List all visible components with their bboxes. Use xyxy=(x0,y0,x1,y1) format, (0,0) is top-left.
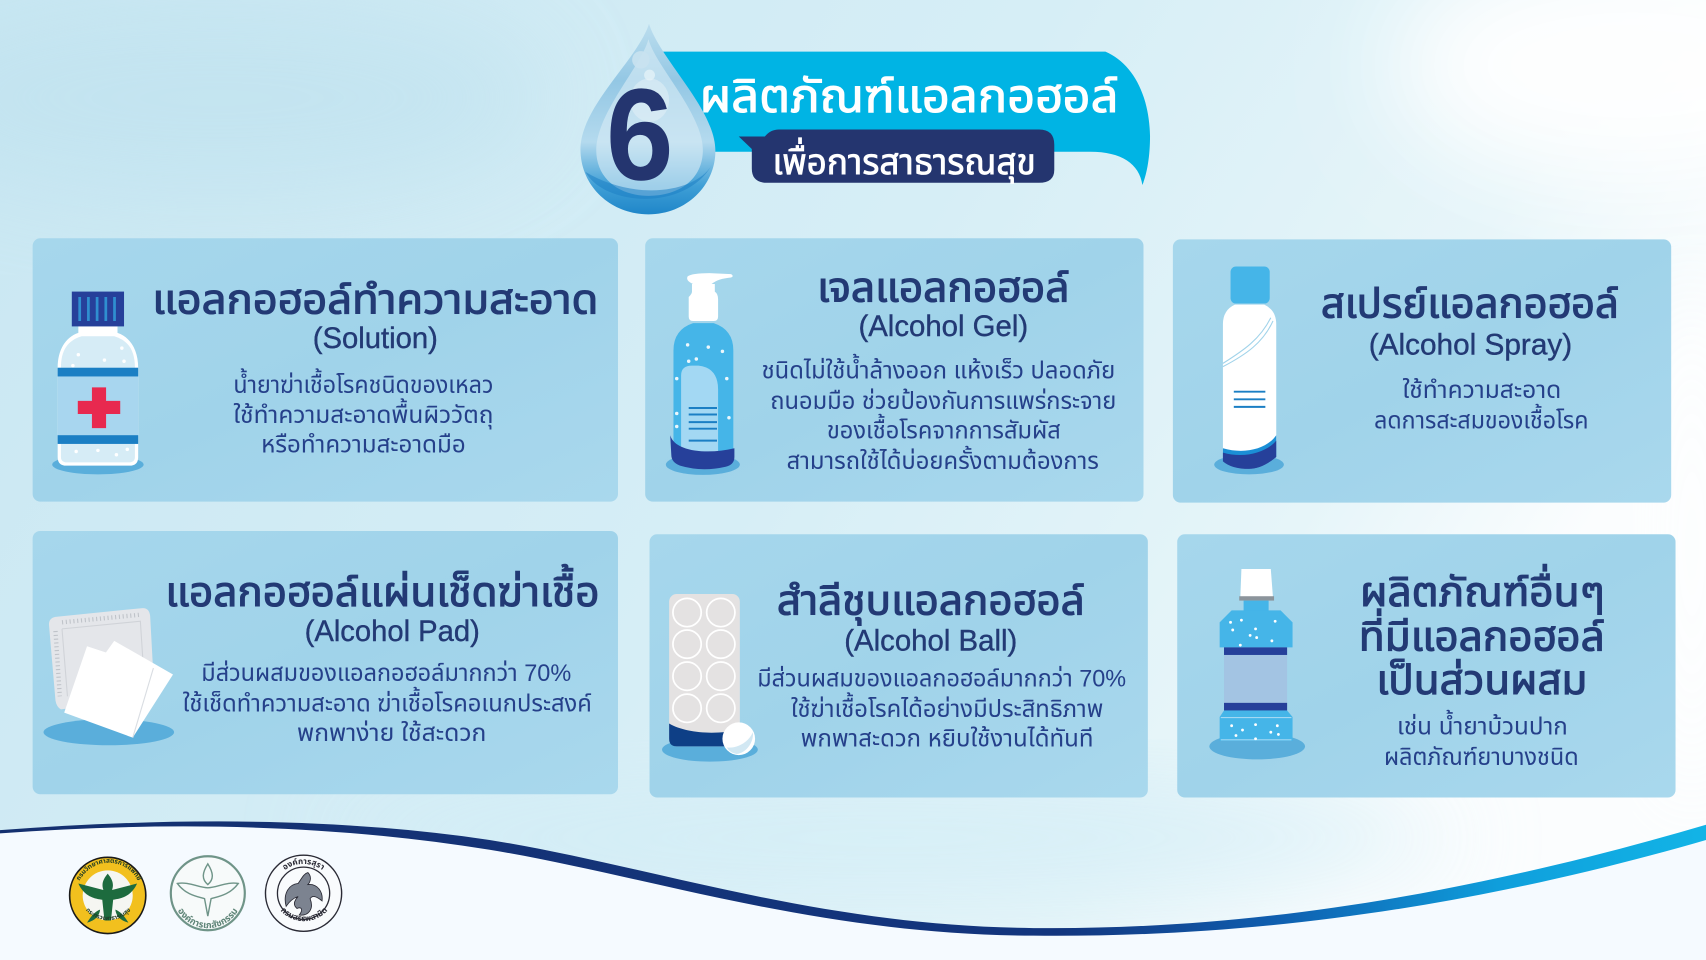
icon: alcohol ball pack xyxy=(662,594,758,762)
description: alcohol pad xyxy=(183,659,592,747)
description: alcohol gel: สามารถใช้ได้บ่อยครั้งตามต้องการ xyxy=(787,445,1099,475)
description: alcohol spray: ลดการสะสมของเชื้อโรค xyxy=(1374,404,1588,435)
heading: alcohol spray: สเปรย์แอลกอฮอล์ xyxy=(1321,281,1619,327)
heading: other products: ที่มีแอลกอฮอล์ xyxy=(1359,609,1605,660)
description: solution xyxy=(233,368,493,459)
description: alcohol spray: ใช้ทำความสะอาด xyxy=(1402,377,1561,404)
description: alcohol ball: พกพาสะดวก หยิบใช้งานได้ทันที xyxy=(801,725,1093,752)
heading: other products: เป็นส่วนผสม xyxy=(1376,657,1587,703)
logo: department of medical sciences xyxy=(68,856,147,934)
panel: alcohol gel xyxy=(645,238,1143,502)
panel: alcohol spray xyxy=(1173,239,1671,503)
heading: solution: แอลกอฮอล์ทำความสะอาด xyxy=(152,276,598,322)
description: solution: ใช้ทำความสะอาดพื้นผิววัตถุ xyxy=(233,398,493,430)
logo: government pharmaceutical organization xyxy=(170,855,246,932)
water drop with number 6 xyxy=(580,24,715,214)
description: other products: ผลิตภัณฑ์ยาบางชนิด xyxy=(1384,744,1579,771)
subtitle pill xyxy=(739,129,1054,183)
description: alcohol gel xyxy=(762,354,1116,475)
icon: solution bottle xyxy=(52,292,144,474)
description: alcohol ball: มีส่วนผสมของแอลกอฮอล์มากกว่า 70% xyxy=(757,665,1126,693)
panel: solution xyxy=(33,238,618,502)
icon: alcohol pads xyxy=(44,608,174,745)
subheading: alcohol gel: (Alcohol Gel) xyxy=(858,310,1028,343)
logo: department of medical sciences: กระทรวงสาธารณสุข xyxy=(86,908,130,920)
description: alcohol pad: ใช้เช็ดทำความสะอาด ฆ่าเชื้อโรคอเนกประสงค์ xyxy=(183,687,592,718)
description: alcohol pad: พกพาง่าย ใช้สะดวก xyxy=(297,719,486,747)
description: alcohol ball xyxy=(757,665,1126,752)
title banner xyxy=(580,24,1150,214)
description: other products: เช่น น้ำยาบ้วนปาก xyxy=(1397,709,1568,740)
description: alcohol gel: ของเชื้อโรคจากการสัมผัส xyxy=(827,414,1061,444)
logo: excise department: องค์การสุรา xyxy=(282,858,324,870)
logo: department of medical sciences: กรมวิทยาศาสตร์การแพทย์ xyxy=(77,858,142,880)
banner ribbon xyxy=(662,52,1150,185)
description: alcohol pad: มีส่วนผสมของแอลกอฮอล์มากกว่า 70% xyxy=(201,659,571,687)
title heading: ผลิตภัณฑ์แอลกอฮอล์ xyxy=(700,70,1118,122)
subheading: alcohol ball: (Alcohol Ball) xyxy=(844,625,1017,658)
heading: alcohol pad: แอลกอฮอล์แผ่นเช็ดฆ่าเชื้อ xyxy=(165,564,599,615)
subheading: alcohol spray: (Alcohol Spray) xyxy=(1369,329,1572,362)
footer white area with wave xyxy=(0,821,1706,960)
icon: gel pump bottle xyxy=(666,273,740,475)
icon: spray can xyxy=(1214,267,1284,474)
heading: other products: ผลิตภัณฑ์อื่นๆ xyxy=(1360,564,1605,615)
panel: other products xyxy=(1177,534,1676,798)
description: alcohol gel: ถนอมมือ ช่วยป้องกันการแพร่กระจาย xyxy=(770,387,1116,415)
panel: alcohol pad xyxy=(33,531,618,794)
logo: excise department: กรมสรรพสามิต xyxy=(280,908,328,922)
description: other products xyxy=(1384,709,1579,771)
logo: government pharmaceutical organization: องค์การเภสัชกรรม xyxy=(178,908,238,928)
description: alcohol ball: ใช้ฆ่าเชื้อโรคได้อย่างมีประสิทธิภาพ xyxy=(791,692,1103,723)
icon: mouthwash bottle xyxy=(1209,569,1305,759)
panel: alcohol ball xyxy=(650,534,1148,798)
subheading: solution: (Solution) xyxy=(313,322,438,355)
heading: other products xyxy=(1359,564,1605,703)
logos row xyxy=(68,854,342,934)
heading: alcohol gel: เจลแอลกอฮอล์ xyxy=(817,264,1070,310)
description: alcohol gel: ชนิดไม่ใช้น้ำล้างออก แห้งเร็ว ปลอดภัย xyxy=(762,354,1115,385)
water drop with number 6: 6 xyxy=(606,62,673,208)
description: alcohol spray xyxy=(1374,377,1588,435)
subtitle pill: เพื่อการสาธารณสุข xyxy=(772,137,1036,183)
heading: alcohol ball: สำลีชุบแอลกอฮอล์ xyxy=(777,578,1085,626)
description: solution: หรือทำความสะอาดมือ xyxy=(261,432,466,459)
logo: excise department xyxy=(264,854,342,932)
description: solution: น้ำยาฆ่าเชื้อโรคชนิดของเหลว xyxy=(233,368,493,399)
subheading: alcohol pad: (Alcohol Pad) xyxy=(305,615,480,648)
